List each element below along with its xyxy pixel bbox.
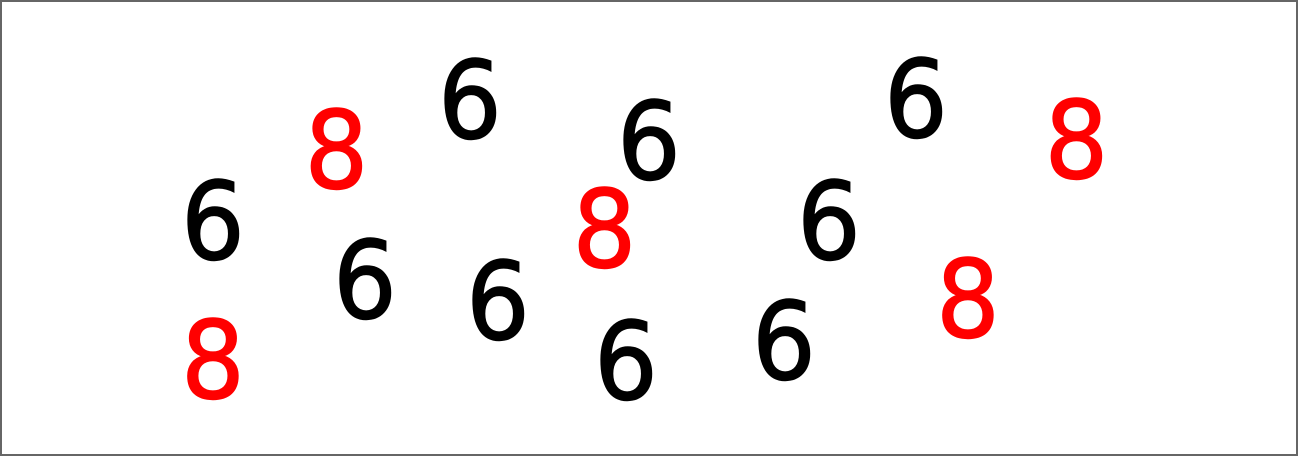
black digit 6: 6 xyxy=(438,38,502,164)
red digit 8: 8 xyxy=(936,237,1000,363)
red digit 8: 8 xyxy=(1045,78,1108,204)
black digit 6: 6 xyxy=(181,159,245,285)
black digit 6: 6 xyxy=(333,218,397,344)
red digit 8: 8 xyxy=(573,167,636,293)
black digit 6: 6 xyxy=(594,299,658,425)
black digit 6: 6 xyxy=(884,37,948,163)
red digit 8: 8 xyxy=(305,88,368,214)
black digit 6: 6 xyxy=(797,159,861,285)
black digit 6: 6 xyxy=(752,279,816,405)
red digit 8: 8 xyxy=(181,298,245,424)
black digit 6: 6 xyxy=(617,79,681,205)
black digit 6: 6 xyxy=(466,239,530,365)
